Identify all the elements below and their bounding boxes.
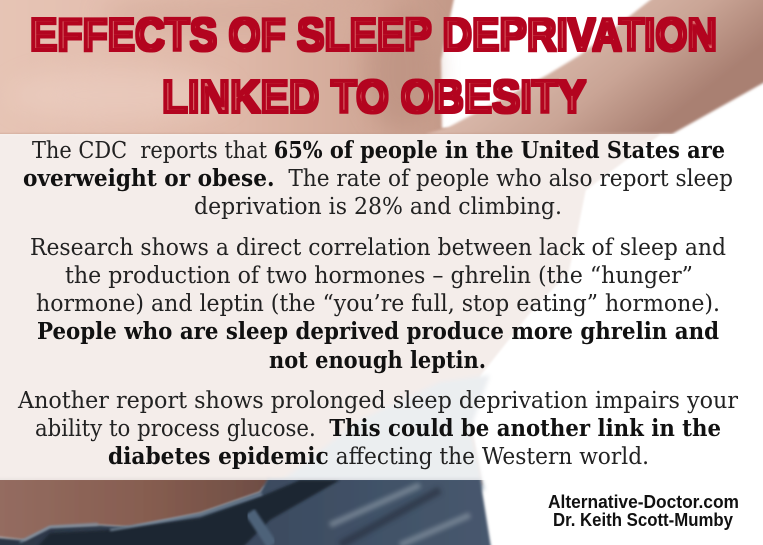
- torso: [0, 0, 660, 485]
- text block: CDC statistics: [23, 137, 733, 220]
- text block: CDC statistics: The CDC reports that 65% of people in the United States are: [32, 137, 725, 164]
- text block: ghrelin and leptin research: hormone) and leptin (the “you’re full, stop eating” hormone).: [36, 291, 720, 317]
- belly below panel: [0, 478, 270, 540]
- website and author credit: [548, 492, 739, 530]
- text block: glucose and diabetes: [17, 388, 738, 470]
- text block: ghrelin and leptin research: the production of two hormones – ghrelin (the “hunger”: [65, 263, 693, 289]
- website and author credit: Alternative-Doctor.com: [548, 492, 739, 512]
- text block: ghrelin and leptin research: [30, 235, 726, 374]
- translucent text panel: [0, 134, 763, 480]
- text block: glucose and diabetes: Another report shows prolonged sleep deprivation impairs your: [17, 388, 738, 414]
- shirt under panel: [270, 375, 490, 490]
- text block: ghrelin and leptin research: People who are sleep deprived produce more ghrelin and: [37, 318, 719, 345]
- website and author credit: Dr. Keith Scott-Mumby: [553, 510, 733, 530]
- text block: ghrelin and leptin research: Research shows a direct correlation between lack of sleep and: [30, 235, 726, 261]
- text block: CDC statistics: deprivation is 28% and climbing.: [194, 194, 562, 220]
- title: [30, 8, 717, 122]
- jeans: [0, 478, 493, 545]
- title: LINKED TO OBESITY: [162, 70, 586, 122]
- arm: [425, 0, 763, 134]
- text block: glucose and diabetes: diabetes epidemic affecting the Western world.: [108, 443, 649, 470]
- text block: CDC statistics: overweight or obese. The rate of people who also report sleep: [23, 165, 733, 192]
- text block: glucose and diabetes: ability to process glucose. This could be another link in the: [35, 415, 721, 442]
- torso shading under panel: [0, 134, 660, 485]
- text block: ghrelin and leptin research: not enough leptin.: [269, 347, 486, 374]
